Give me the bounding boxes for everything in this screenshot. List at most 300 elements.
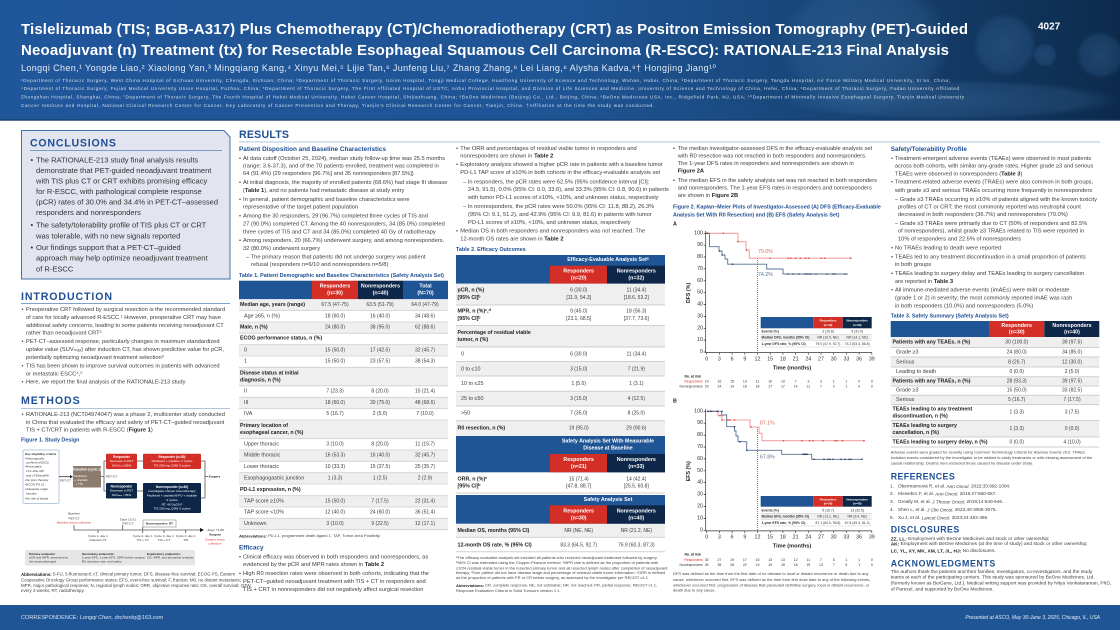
table 2: 4 (12.5) <box>628 396 645 402</box>
efficacy bullets continued: • <box>456 162 458 168</box>
efficacy bullets continued: – In responders, the pCR rates were 62.5% (95% confidence interval [CI]: <box>463 179 650 185</box>
table 3 footnote: causal relationship. Deaths here excluded those caused by disease under study. <box>891 460 1033 466</box>
table 2: 1 (5.0) <box>571 381 586 387</box>
table 1: 1 <box>244 359 247 365</box>
chart: EFS Kaplan-Meier: 24 <box>805 535 811 541</box>
arrow to induction: PET-CT <box>60 478 71 482</box>
timeline: Cycle 3, day 1 <box>154 534 174 538</box>
table 1: 38 (54.3) <box>415 359 435 365</box>
chart: EFS Kaplan-Meier: 9 <box>743 535 746 541</box>
introduction bullets: of care for locally advanced R-ESCC.¹ However, preoperative CRT may have <box>26 315 221 321</box>
table 2: 8 (25.0) <box>628 411 645 417</box>
efficacy bullets: High R0 resection rates were observed in both cohorts, indicating that the <box>243 571 429 577</box>
EFS numbers at risk: 5 <box>833 558 835 562</box>
nonresponder criterion box: SUVₘₐₓ <35% <box>112 493 131 497</box>
table 1: 24 (80.0) <box>325 325 345 331</box>
table 1: 3 (10.0) <box>326 441 344 447</box>
table 1: 3 (10.0) <box>326 521 344 527</box>
footer bar: CORRESPONDENCE: Longqi Chen, drchenlq@163.com <box>21 615 164 621</box>
EFS summary table: (n=30) <box>824 502 832 506</box>
table 2: 25 to ≤50 <box>461 396 483 402</box>
DFS summary table: 1-year DFS rate, % (95% CI) <box>762 342 806 346</box>
efficacy bullets continued: – In nonresponders, the pCR rates were 50.0% (95% CI: 11.8, 88.2), 26.3% <box>463 204 654 210</box>
table 2 footnotes: ᵇ95% CI was estimated using the Clopper-Pearson method. ᶜMPR rate is defined as the proportion of patients with <box>456 560 658 565</box>
table 1: 16 (40.0) <box>370 313 390 319</box>
nonresponder treatment box: Nonresponder (n=40) <box>156 485 188 489</box>
table 1: 7 (17.5) <box>371 498 389 504</box>
table 2 header: measurable disease: Disease at Baseline <box>583 446 633 452</box>
table 1: Median age, years (range) <box>240 302 305 308</box>
DFS numbers at risk: 0 <box>858 379 860 383</box>
timeline <box>57 512 225 546</box>
EFS axis labels: 40 <box>697 480 703 486</box>
table 3: 28 (93.3) <box>1007 378 1027 384</box>
disposition bullets: • <box>239 197 241 203</box>
table 2 footnotes <box>456 555 668 593</box>
affiliations: Zhongshan Hospital, Shanghai, China; ⁷Department of Thoracic Surgery, The Fourth Hospital of Hebei Medical University, Hebei Cancer Hospital, Shijiazhuang, China; ⁸BeOne Medicines (Beijing) Co., Ltd., Beijing, China; ⁹BeOne Medicines USA, Inc., Ridgefield Park, NJ, USA; ¹⁰Department of Minimally Invasive Esophageal Surgery, Tianjin Medical University <box>21 94 965 100</box>
EFS numbers at risk: 27 <box>717 558 721 562</box>
table 1 header: (n=30) <box>327 290 343 296</box>
conclusions bullets: of R-ESCC <box>36 264 74 274</box>
table 1: 34 (48.6) <box>415 313 435 319</box>
table 1: Esophagogastric junction <box>244 475 304 481</box>
conclusions bullets: The safety/tolerability profile of TIS plus CT or CRT <box>36 220 207 230</box>
table 2: [37.7, 73.6] <box>624 316 649 322</box>
safety bullets: • <box>891 288 893 294</box>
figure 2 title <box>673 204 881 218</box>
acknowledgments text: teams at each of the participating centers. This study was sponsored by BeOne Medicines, Ltd. <box>891 574 1095 580</box>
table 1: 11 (15.7) <box>415 441 435 447</box>
efficacy bullets continued: Median OS in both responders and nonresponders was not reached. The <box>460 229 645 235</box>
safety bullets: decreased in both responders (36.7%) and nonresponders (70.0%) <box>898 212 1068 218</box>
conclusions bullets: • <box>30 243 34 252</box>
table 2: 14 (42.4) <box>626 477 647 483</box>
DFS summary table: NR (14.1, NE) <box>847 336 868 340</box>
table 3: 1 (3.3) <box>1009 410 1024 416</box>
title <box>21 21 968 59</box>
timeline: Induction CT <box>89 538 107 542</box>
table 2: 12-month OS rate, % (95% CI) <box>458 542 532 548</box>
table 1: 38 (95.0) <box>370 325 390 331</box>
chart: EFS Kaplan-Meier: 15 <box>767 535 773 541</box>
disclosures text: ZZ, LL: Employment with BeOne Medicines and stock or other ownership; <box>891 536 1050 542</box>
efficacy bullets continued <box>456 146 669 243</box>
EFS numbers at risk: 19 <box>768 563 772 567</box>
table 2: >50 <box>461 411 470 417</box>
table 3 header <box>891 321 1099 337</box>
table 2 header: efficacy-evaluable: Nonresponders <box>617 268 656 274</box>
figure 1: study design <box>23 450 225 566</box>
chart: EFS Kaplan-Meier: 33 <box>843 535 849 541</box>
table 3: 0 (0.0) <box>1009 439 1024 445</box>
figure 2 title: Analysis Set With R0 Resection) and (B) EFS (Safety Analysis Set) <box>673 212 840 218</box>
DFS axis labels <box>694 230 703 355</box>
table 1: 15 (50.0) <box>325 347 345 353</box>
table 2 header: measurable disease: (n=21) <box>571 464 587 470</box>
DFS numbers at risk: 3 <box>807 379 809 383</box>
conclusions bullets: • <box>30 156 34 164</box>
disposition bullets: Among responders, 20 (66.7%) underwent surgery, and among nonresponders, <box>243 238 445 244</box>
DFS numbers at risk: No. at risk <box>684 374 701 378</box>
table 2: [95% CI]ᵇ <box>458 484 480 490</box>
table 2 header: safety set <box>456 495 665 524</box>
DFS axis labels: 10 <box>697 337 703 343</box>
DFS numbers at risk: 15 <box>730 379 734 383</box>
conclusions bullets: Our findings support that a PET-CT–guided <box>36 243 181 252</box>
disposition bullets: At initial diagnosis, the majority of enrolled patients (68.6%) had stage III disease <box>243 180 447 186</box>
chart: EFS Kaplan-Meier: Time (months) <box>773 544 811 550</box>
DFS numbers at risk: 3 <box>820 379 822 383</box>
introduction bullets: rather than neoadjuvant CRT² <box>26 331 102 337</box>
table 1: 32 (45.7) <box>415 347 435 353</box>
DFS numbers at risk: 17 <box>768 384 772 388</box>
references list: Kleivebro F, et al. Ann Oncol. 2016;27:660-667. <box>898 491 997 496</box>
EFS axis labels: 30 <box>697 492 703 498</box>
table 2: 10 to ≤25 <box>461 381 483 387</box>
EFS numbers at risk: 13 <box>819 563 823 567</box>
timeline: TIS <box>183 538 188 542</box>
efficacy bullets: Clinical efficacy was observed in both responders and nonresponders, as <box>243 555 428 561</box>
EFS axis labels: 10 <box>697 515 703 521</box>
DFS axis labels: 100 <box>694 230 703 236</box>
conclusions bullets: • <box>30 220 34 230</box>
induction box: Paclitaxel <box>73 474 87 478</box>
DFS nonresponder curve <box>707 233 848 274</box>
EFS numbers at risk: 0 <box>871 558 873 562</box>
methods bullet <box>22 412 225 434</box>
table 3: Grade ≥3 <box>896 388 918 394</box>
chart: EFS Kaplan-Meier: 6 <box>731 535 734 541</box>
authors: Longqi Chen,¹ Yongde Liao,² Xiaolong Yan,³ Mingqiang Kang,⁴ Xinyu Mei,⁵ Lijie Tan,⁶ Junfeng Liu,⁷ Zhang Zhang,⁸ Lei Liang,⁸ Alysha Kadva,⁹† Hongjing Jiang¹⁰ <box>21 63 716 73</box>
title: Neoadjuvant (n) Treatment (tx) for Resectable Esophageal Squamous Cell Carcinoma (R-ESCC): RATIONALE-213 Final Analysis <box>21 42 949 59</box>
EFS numbers at risk: 17 <box>743 558 747 562</box>
table 2: 7 (35.0) <box>570 411 588 417</box>
table 2 footnotes: Response Evaluation Criteria in Solid Tumours version 1.1. <box>456 588 560 593</box>
safety bullets: profiles of CT or CRT; the most commonly reported was neutrophil count <box>898 205 1081 211</box>
eligibility box: •No risk of fistula <box>25 496 48 500</box>
DFS numbers at risk: Responders <box>684 379 703 383</box>
DFS axis labels: 20 <box>697 325 703 331</box>
table 1 title: Table 1. Patient Demographic and Baseline Characteristics (Safety Analysis Set) <box>239 273 444 279</box>
DFS numbers at risk: 29 <box>705 384 709 388</box>
DFS numbers at risk: 18 <box>743 384 747 388</box>
table 1: IVA <box>244 411 253 417</box>
affiliations: Cancer Institute and Hospital, National Clinical Research Center for Cancer, Key Laboratory of Cancer Prevention and Therapy, Tianjin's Clinical Research Center for Cancer, Tianjin, China. †Affiliation at the time the study was conducted. <box>21 103 654 108</box>
table 2: [23.1, 68.5] <box>566 316 592 322</box>
DFS axis labels: 30 <box>697 313 703 319</box>
table 3 footnote: included events considered by the investigator to be related to study treatments or with missing assessment of the <box>891 455 1093 460</box>
table 3 header: Responders <box>1001 323 1032 329</box>
table 2 footnotes: as the proportion of patients with PR or CR before surgery, as assessed by the investigator per RECIST v1.1. <box>456 575 649 580</box>
footer bar: Presented at ASCO, May 30-June 3, 2025, Chicago, IL, USA <box>965 615 1101 621</box>
chart: DFS Kaplan-Meier: 27 <box>818 356 824 362</box>
table 1 header: Nonresponders <box>361 283 400 289</box>
safety bullets: in both groups <box>895 262 931 268</box>
survival bullets <box>673 146 877 199</box>
table 2 header: efficacy-evaluable <box>456 255 665 284</box>
table 1 header: (n=40) <box>373 290 389 296</box>
table 2: NR (NE, NE) <box>564 528 593 534</box>
heading: acknowledgments: ACKNOWLEDGMENTS <box>891 559 995 569</box>
table 2: pCR, n (%) <box>458 288 485 294</box>
chart: DFS Kaplan-Meier: 30 <box>831 356 837 362</box>
timeline: PET-CT <box>122 522 134 526</box>
EFS summary table: NR (13.1, NE) <box>817 514 839 518</box>
table 3: 39 (97.5) <box>1062 340 1082 346</box>
heading: disclosures: DISCLOSURES <box>891 525 959 535</box>
disclosures text: AK: Employment with BeOne Medicines (at the time of study) and stock or other ownership; <box>891 541 1087 547</box>
nonresponder treatment box: 2 cycles <box>166 498 178 502</box>
table 1: esophageal cancer, n (%) <box>240 430 304 436</box>
safety bullets: with grade ≥3 and serious TRAEs occurring more frequently in nonresponders <box>894 188 1092 194</box>
safety bullets: • <box>891 271 893 277</box>
affiliations: ⁴Department of Thoracic Surgery, Fujian Medical University Union Hospital, Fuzhou, China; ⁵Department of Thoracic Surgery, The First Affiliated Hospital of USTC, Anhui Provincial Hospital, and Division of Life Sciences and Medicine, University of Science and Technology of China, Hefei, China; ⁶Department of Thoracic Surgery, Fudan University Affiliated <box>21 86 959 91</box>
DFS summary table: (n=29) <box>853 323 862 327</box>
table 2: 3 (15.0) <box>570 366 588 372</box>
table 2: MPR, n (%)ᶜ,ᵈ <box>458 309 491 315</box>
table 1: PD-L1 expression, n (%) <box>240 487 301 493</box>
connector to arms <box>101 461 208 498</box>
figure 2 title: Figure 2. Kaplan–Meier Plots of Investigator-Assessed (A) DFS (Efficacy-Evaluable <box>673 204 881 210</box>
table 3: Patients with any TEAEs, n (%) <box>892 340 970 346</box>
DFS numbers at risk: 13 <box>743 379 747 383</box>
DFS responder curve <box>707 233 852 258</box>
chart: EFS Kaplan-Meier: 27 <box>818 535 824 541</box>
introduction bullets: additional safety concerns, leading to some patients receiving neoadjuvant CT <box>26 323 224 329</box>
figure 2 footnote: whichever occurred first: progression of disease that precluded definitive surgery, local or distant recurrence, or <box>673 582 870 588</box>
DFS numbers at risk: Nonresponders <box>680 384 703 388</box>
endpoints box: Exploratory endpoints: <box>147 552 181 556</box>
chart: DFS Kaplan-Meier: 18 <box>780 356 786 362</box>
table 1: Unknown <box>244 521 266 527</box>
responder criterion box: SUVₘₐₓ ≥35% <box>112 464 131 468</box>
eligibility box: Key eligibility criteria <box>25 452 56 456</box>
endpoints box: the local pathologist <box>29 560 56 564</box>
eligibility box: •Resectable <box>25 465 42 469</box>
induction box: + TIS <box>75 482 83 486</box>
table 3: Serious <box>896 397 915 403</box>
disposition bullets: refusal (responders n=6/10 and nonresponders n=5/8) <box>251 262 388 268</box>
table 1: TAP score <10% <box>244 510 284 516</box>
figure 1 abbreviations: Cooperative Oncology Group performance status; EFS, event-free survival; F, fraction; M0, no distant metastasis; <box>21 578 241 582</box>
DFS axis labels: 60 <box>697 278 703 284</box>
table 2 header: efficacy-evaluable: (n=20) <box>571 275 587 281</box>
chart: EFS Kaplan-Meier: 39 <box>869 535 875 541</box>
table 2 header: safety set: Nonresponders <box>617 508 656 514</box>
table 3 footnote: Adverse events were graded for severity using Common Terminology Criteria for Adverse Events v5.0. TRAEs <box>891 450 1085 454</box>
timeline: Surgery <box>209 533 221 537</box>
EFS numbers at risk: 13 <box>768 558 772 562</box>
DFS numbers at risk: 1 <box>833 379 835 383</box>
survival bullets: are shown in Figure 2B <box>678 193 738 199</box>
EFS numbers at risk: 13 <box>781 558 785 562</box>
table 3: cancellation, n (%) <box>892 430 939 436</box>
chart: EFS Kaplan-Meier: 67.8% <box>760 454 775 460</box>
affiliations <box>21 78 965 108</box>
EFS numbers at risk: 5 <box>845 563 847 567</box>
footer bar <box>0 605 1120 630</box>
references list: Shen L, et al. J Clin Oncol. 2022;40:3065-3076. <box>898 507 997 512</box>
EFS numbers at risk: 0 <box>871 563 873 567</box>
responder criterion box: Responder <box>113 455 131 459</box>
introduction bullets: Here, we report the final analysis of the RATIONALE-213 study <box>26 380 186 386</box>
table 2 footnotes: therapy. ᵈOne patient did not have disease stage and percentage of residual viable tumor information. ᵉORR is defined <box>456 570 665 575</box>
table 1: Upper thoracic <box>244 441 279 447</box>
endpoints box: Primary endpoint: <box>29 552 55 556</box>
EFS numbers at risk: 35 <box>717 563 721 567</box>
table 3: 5 (16.7) <box>1008 397 1026 403</box>
table 1 header: (N=70) <box>417 290 434 296</box>
DFS numbers at risk: 18 <box>756 384 759 388</box>
table 2 header: efficacy-evaluable: (n=32) <box>628 275 644 281</box>
table 2: [18.6, 53.2] <box>624 295 649 301</box>
table 2 header: safety set: Responders <box>563 508 594 514</box>
timeline: Baseline <box>68 512 80 516</box>
table 2 header: measurable disease: Nonresponders <box>617 457 656 463</box>
safety bullets: Treatment-emergent adverse events (TEAEs) were observed in most patients <box>895 156 1091 162</box>
methods bullet: in China that evaluated the efficacy and safety of PET-CT–guided neoadjuvant <box>26 420 225 426</box>
chart: EFS Kaplan-Meier: 12 <box>755 535 760 541</box>
DFS summary table: Events (%) <box>762 330 779 334</box>
table 3: 0 (0.0) <box>1009 369 1024 375</box>
table 1: III <box>244 400 248 406</box>
methods bullet: TIS + CT/CRT in patients with R-ESCC (Figure 1) <box>26 428 153 434</box>
disposition bullets: (range: 3.6-37.3), and of the 70 patients enrolled, treatment was completed in <box>243 164 439 170</box>
heading: introduction: INTRODUCTION <box>21 291 112 303</box>
induction box: + cisplatin <box>74 478 88 482</box>
timeline: Cycle 1, day 1 <box>88 534 108 538</box>
subheading: patient disposition: Patient Disposition and Baseline Characteristics <box>239 146 386 153</box>
endpoints box <box>25 550 195 566</box>
table 2 header: efficacy-evaluable: Efficacy-Evaluable Analysis Setᵃ <box>567 257 649 263</box>
chart: DFS Kaplan-Meier: 3 <box>718 356 721 362</box>
table 2: [25.5, 60.8] <box>624 484 649 490</box>
timeline: PET-CT <box>68 516 80 520</box>
introduction bullets: • <box>22 307 24 313</box>
chart: EFS Kaplan-Meier: 36 <box>856 535 862 541</box>
figure 2 footnote: DFS was defined as the time from the first date of no disease to local or distant recurrence or death due to any <box>673 571 868 576</box>
introduction bullets: uptake value (SUVₘₐₓ) after induction CT, has shown predictive value for pCR, <box>26 347 224 353</box>
survival bullets: • <box>673 178 675 184</box>
table 2: R0 resection, n (%) <box>458 426 505 432</box>
conclusions bullets: The RATIONALE-213 study final analysis results <box>36 156 198 164</box>
table 1: 8 (20.0) <box>371 441 389 447</box>
chart: EFS Kaplan-Meier: 30 <box>831 535 837 541</box>
EFS nonresponder curve <box>707 411 862 459</box>
DFS numbers at risk: 10 <box>781 379 785 383</box>
table 2: 9 (45.0) <box>570 309 588 315</box>
disposition bullets: (Table 1), and no patients had metastatic disease at study entry <box>243 188 405 194</box>
table 2: 0 <box>461 351 464 357</box>
responder treatment box: Paclitaxel + cisplatin, 2 cycles <box>152 459 193 463</box>
EFS 12-month labels: 87.1% <box>760 420 775 426</box>
DFS summary table: NR (10.0, NE) <box>817 336 839 340</box>
table 3: Patients with any TRAEs, n (%) <box>892 378 971 384</box>
responder criterion box: Decrease in PET <box>110 459 133 463</box>
table 2 header: measurable disease: Responders <box>563 457 594 463</box>
nonresponder treatment box <box>143 483 201 513</box>
table 1: 25 (35.7) <box>415 464 435 470</box>
introduction bullets: • <box>22 380 24 386</box>
EFS numbers at risk: No. at risk <box>684 552 701 556</box>
figure 1 abbreviations <box>21 572 252 593</box>
references list: 5. <box>890 515 894 520</box>
nonresponder criterion box <box>106 483 137 498</box>
table 2: [95% CI]ᵇ <box>458 316 480 322</box>
table 2: ORR, n (%)ᵉ <box>458 477 487 483</box>
table 2 header: measurable disease: Safety Analysis Set With Measurable <box>562 439 654 445</box>
table 2: 1 (3.1) <box>629 381 644 387</box>
safety bullets: in both responders (10.0%) and nonresponders (5.0%) <box>895 303 1033 309</box>
EFS numbers at risk: Nonresponders <box>680 563 703 567</box>
safety bullets: 10% of responders and 22.5% of nonresponders <box>898 236 1021 242</box>
disposition bullets: 27 (90.0%) completed CT. Among the 40 nonresponders, 34 (85.0%) completed <box>243 222 445 228</box>
table 2: 3 (15.0) <box>570 396 588 402</box>
table 1: 12 (17.1) <box>415 521 435 527</box>
efficacy bullets <box>239 555 429 593</box>
table 1: 24 (60.0) <box>370 510 390 516</box>
figure 2 footnote: cause, whichever occurred first. EFS was defined as the time from first dose date to any of the following events, <box>673 577 870 582</box>
EFS numbers at risk: 1 <box>845 558 847 562</box>
table 3: TEAEs leading to surgery <box>892 423 957 429</box>
table 1: 7 (10.0) <box>416 411 434 417</box>
DFS numbers at risk: 11 <box>806 384 810 388</box>
table 1: 32 (45.7) <box>415 453 435 459</box>
survival bullets: The 1-year DFS rates in responders and nonresponders are shown in <box>678 161 854 167</box>
EFS axis labels: 20 <box>697 504 703 510</box>
DFS axis labels: 90 <box>697 242 703 248</box>
efficacy bullets: PET-CT–guided neoadjuvant treatment with TIS + CT in responders and <box>243 579 426 585</box>
safety bullets: • <box>891 245 893 251</box>
DFS axis labels: 70 <box>697 266 703 272</box>
figure 1: study design: PET-CT <box>106 474 117 478</box>
disposition bullets: representative of the target patient population <box>243 205 358 211</box>
figure 1 abbreviations: every 3 weeks; RT, radiotherapy. <box>21 588 85 593</box>
chart: DFS Kaplan-Meier: 9 <box>743 356 746 362</box>
table 1: 0 <box>244 347 247 353</box>
table 2 header: safety set: (n=30) <box>571 515 587 521</box>
nonresponder treatment box: Investigator-chosen chemotherapy <box>148 489 196 493</box>
disposition bullets <box>239 156 447 268</box>
eligibility box <box>23 450 59 504</box>
timeline: collection <box>209 542 222 546</box>
EFS numbers at risk: 11 <box>806 558 810 562</box>
DFS numbers at risk: 0 <box>871 384 873 388</box>
EFS numbers at risk: 19 <box>756 563 759 567</box>
eligibility box: function <box>26 492 37 496</box>
EFS axis labels: 100 <box>694 408 703 414</box>
table 3: 4 (10.0) <box>1063 439 1081 445</box>
table 1: Age ≥65, n (%) <box>244 313 280 319</box>
introduction bullets: Preoperative CRT followed by surgical resection is the recommended standard <box>26 307 225 313</box>
EFS summary table: 87.1 (64.3, 95.8) <box>816 521 840 525</box>
methods bullet: RATIONALE-213 (NCT04974047) was a phase 2, multicenter study conducted <box>26 412 225 418</box>
EFS summary table: Median EFS, months (95% CI) <box>762 514 809 518</box>
DFS numbers at risk: 16 <box>717 379 721 383</box>
table 3: discontinuation, n (%) <box>892 414 948 420</box>
EFS numbers at risk: 15 <box>806 563 810 567</box>
eligibility box: and cT3NanyM0 <box>26 474 49 478</box>
table 1: 18 (60.0) <box>325 400 345 406</box>
table 1: 1 (3.3) <box>328 475 343 481</box>
EFS axis labels: 90 <box>697 420 703 426</box>
EFS summary table: Events (%) <box>762 508 779 512</box>
eligibility box: confirmed ESCC <box>26 460 50 464</box>
EFS numbers at risk: 28 <box>730 563 734 567</box>
chart: DFS Kaplan-Meier: 12 <box>755 356 760 362</box>
table 1: 1 (2.5) <box>373 475 388 481</box>
table 1: 7 (23.3) <box>326 389 344 395</box>
